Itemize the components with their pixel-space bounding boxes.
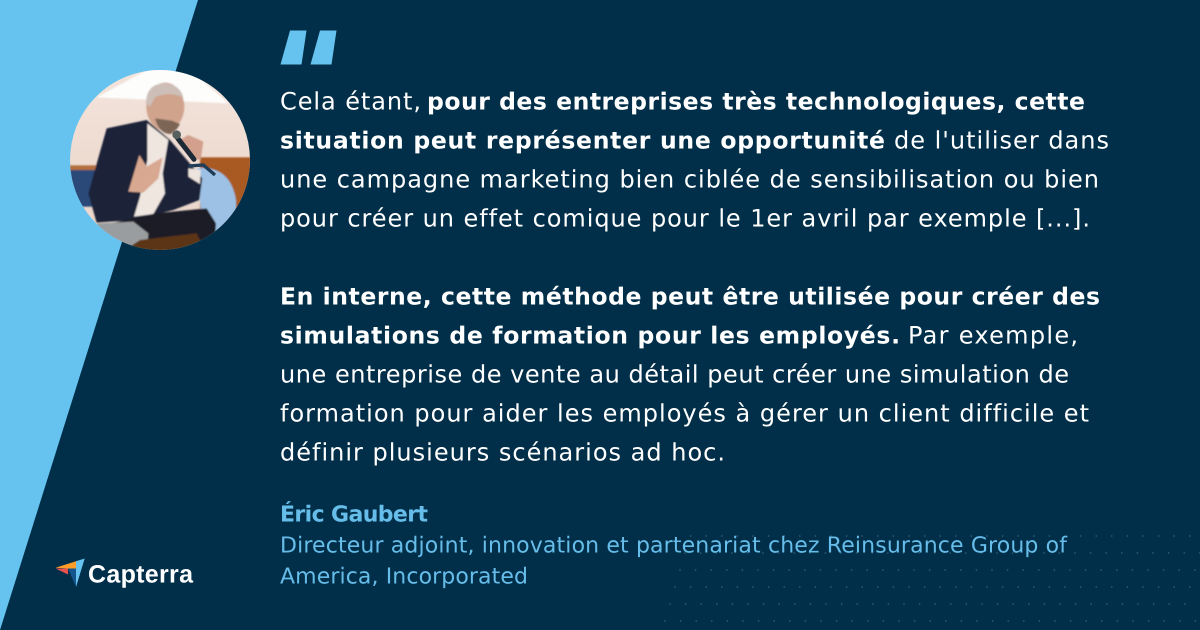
quote: first paragraph: une campagne marketing bien ciblée de sensibilisation ou bien [280,166,1099,194]
quote: second paragraph: simulations de formation pour les employés. [280,322,900,350]
quote: first paragraph: Cela étant, [280,88,421,116]
Capterra logo: Capterra [88,560,194,588]
attribution: Directeur adjoint, innovation et partenariat chez Reinsurance Group of [280,534,1068,558]
quote: second paragraph: formation pour aider les employés à gérer un client difficile et [280,400,1089,428]
quote: second paragraph: Par exemple, [908,322,1078,350]
attribution [280,501,1068,589]
icon: quotation mark [280,30,336,64]
portrait photo [67,67,253,253]
attribution: America, Incorporated [280,564,528,589]
dotted pattern [665,536,1200,621]
light blue diagonal band [0,0,198,630]
quote: second paragraph [280,282,1100,466]
quote: second paragraph: En interne, cette méthode peut être utilisée pour créer des [280,282,1100,310]
quote: first paragraph: de l'utiliser dans [894,126,1109,154]
quote: first paragraph: pour des entreprises très technologiques, cette [427,88,1085,116]
quote: second paragraph: définir plusieurs scénarios ad hoc. [280,438,725,466]
quote: first paragraph: pour créer un effet comique pour le 1er avril par exemple [...]. [280,204,1090,232]
quote: first paragraph: situation peut représenter une opportunité [280,126,885,154]
quote: first paragraph [280,88,1109,232]
attribution: Éric Gaubert [280,501,428,528]
quote: second paragraph: une entreprise de vente au détail peut créer une simulation de [280,360,1069,388]
